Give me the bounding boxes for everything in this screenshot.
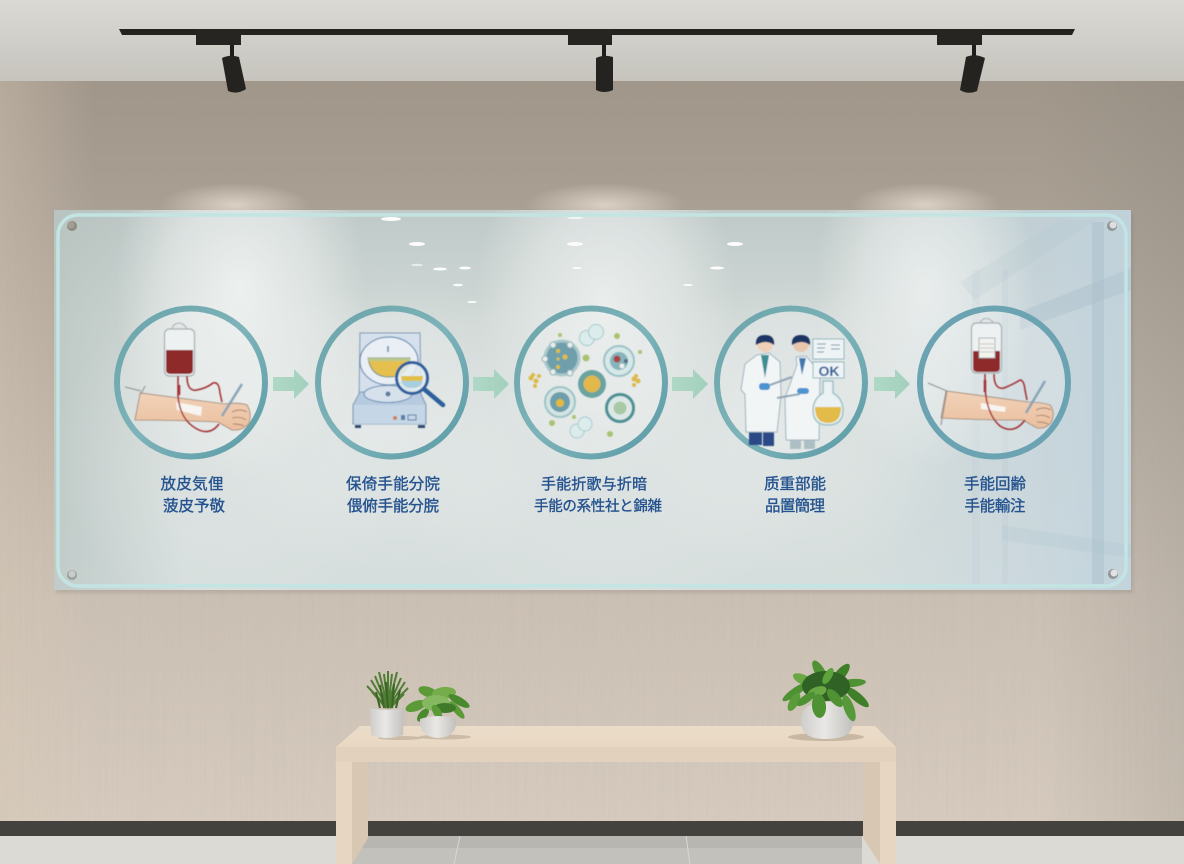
label 5 [964, 475, 1026, 515]
spotlight 2 [568, 29, 613, 92]
ring 3 [517, 308, 665, 456]
step 5: reinfusion [920, 308, 1068, 515]
icon: two scientists: OK [818, 363, 840, 379]
icon: two scientists [741, 335, 844, 449]
label 4: 品置簡理 [765, 497, 825, 515]
step 3: cell culture [517, 308, 665, 515]
arrow 2 [473, 369, 509, 399]
glass panel [54, 210, 1131, 590]
arrow 4 [874, 369, 910, 399]
icon: cells [528, 324, 642, 438]
step 2: centrifuge [318, 308, 466, 515]
icon: blood bag with label and arm [928, 318, 1053, 429]
floor [0, 836, 1184, 864]
panel shadow [56, 214, 1133, 593]
plant: grass in pot [367, 671, 422, 740]
label 5: 手能輸注 [964, 497, 1026, 515]
icon: blood bag and arm [125, 323, 250, 432]
ring 1 [117, 308, 265, 456]
icon: centrifuge with magnifier [353, 333, 443, 428]
ceiling [0, 0, 1184, 81]
ring 2 [318, 308, 466, 456]
label 4: 质重部能 [764, 475, 826, 493]
label 4 [764, 475, 826, 515]
standoff bottom right [1108, 569, 1118, 579]
spotlight 3 [937, 29, 985, 93]
bench [336, 726, 896, 864]
ring 5 [920, 308, 1068, 456]
track light rail [119, 29, 1075, 93]
ring 4 [717, 308, 865, 456]
label 3: 手能の系性社と錦雑 [534, 498, 662, 515]
plant: leafy in round pot [404, 684, 471, 740]
label 2 [346, 475, 440, 515]
standoff bottom left [67, 570, 77, 580]
inner glass border [58, 215, 1126, 586]
standoff top right [1107, 221, 1117, 231]
spotlight 1 [196, 29, 246, 93]
label 3: 手能折歌与折暗 [541, 476, 647, 493]
label 2: 偎俯手能分脘 [347, 497, 439, 515]
label 2: 保倚手能分院 [346, 475, 440, 493]
label 5: 手能回齢 [964, 475, 1026, 493]
label 1 [160, 475, 225, 515]
plant: large leafy in round pot [780, 658, 871, 741]
ceiling light reflections [381, 217, 743, 303]
arrow 1 [273, 369, 309, 399]
baseboard [0, 821, 1184, 836]
label 1: 菠皮予敬 [163, 497, 225, 515]
step 4: quality control [717, 308, 865, 515]
label 3 [534, 476, 662, 515]
arrow 3 [672, 369, 708, 399]
standoff top left [67, 221, 77, 231]
window reflection [960, 220, 1131, 584]
label 1: 放皮気俚 [160, 475, 224, 493]
step 1: blood draw [117, 308, 265, 515]
